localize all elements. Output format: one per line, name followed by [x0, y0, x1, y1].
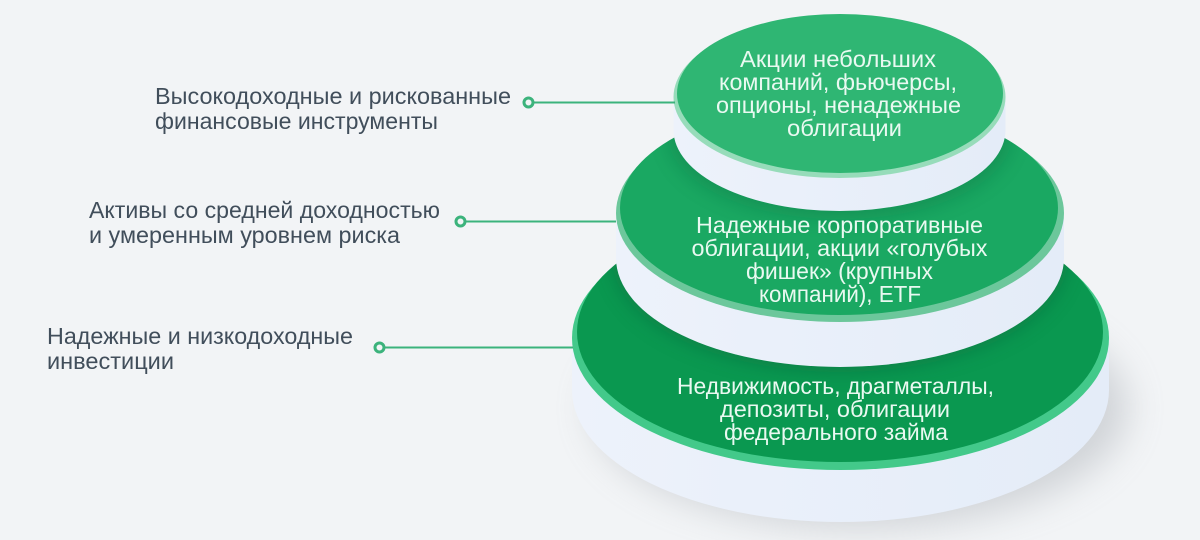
- pyramid tier: top: [674, 14, 1006, 211]
- middle disk rim: [616, 104, 1064, 322]
- middle disk text: облигации, акции «голубых: [692, 235, 988, 261]
- top disk text: облигации: [787, 115, 902, 141]
- bottom disk text: Недвижимость, драгметаллы,: [677, 373, 994, 399]
- middle disk face: [620, 101, 1058, 315]
- top disk side: [674, 97, 1006, 211]
- label: medium risk: и умеренным уровнем риска: [89, 222, 400, 248]
- label: high risk: финансовые инструменты: [155, 108, 438, 134]
- pyramid tier: middle: [616, 138, 1064, 367]
- bottom disk side: [572, 338, 1109, 522]
- top disk text: компаний, фьючерсы,: [719, 69, 957, 95]
- middle disk side: [616, 213, 1064, 367]
- label: high risk: Высокодоходные и рискованные: [155, 83, 511, 109]
- connector: high risk: [524, 98, 675, 107]
- top disk text: опционы, ненадежные: [716, 92, 961, 118]
- bottom disk text: федерального займа: [724, 419, 948, 445]
- top disk face: [677, 14, 1003, 173]
- label: low risk: инвестиции: [47, 348, 174, 374]
- top disk rim: [674, 16, 1006, 178]
- middle disk text: фишек» (крупных: [746, 258, 933, 284]
- connector: medium risk: [456, 217, 616, 226]
- shadow on bottom disk: [609, 264, 1071, 376]
- bottom disk face: [577, 202, 1103, 462]
- ground shadow: [592, 288, 1128, 528]
- bottom disk rim: [572, 206, 1109, 470]
- middle disk text: компаний), ETF: [759, 281, 921, 307]
- middle disk text: Надежные корпоративные: [696, 212, 983, 238]
- top disk text: Акции небольших: [740, 46, 937, 72]
- label: low risk: Надежные и низкодоходные: [47, 323, 353, 349]
- connector: low risk: [375, 343, 573, 352]
- label: medium risk: Активы со средней доходностью: [89, 197, 440, 223]
- bottom disk text: депозиты, облигации: [720, 396, 950, 422]
- shadow on middle disk: [664, 138, 1015, 222]
- pyramid tier: bottom: [572, 264, 1109, 522]
